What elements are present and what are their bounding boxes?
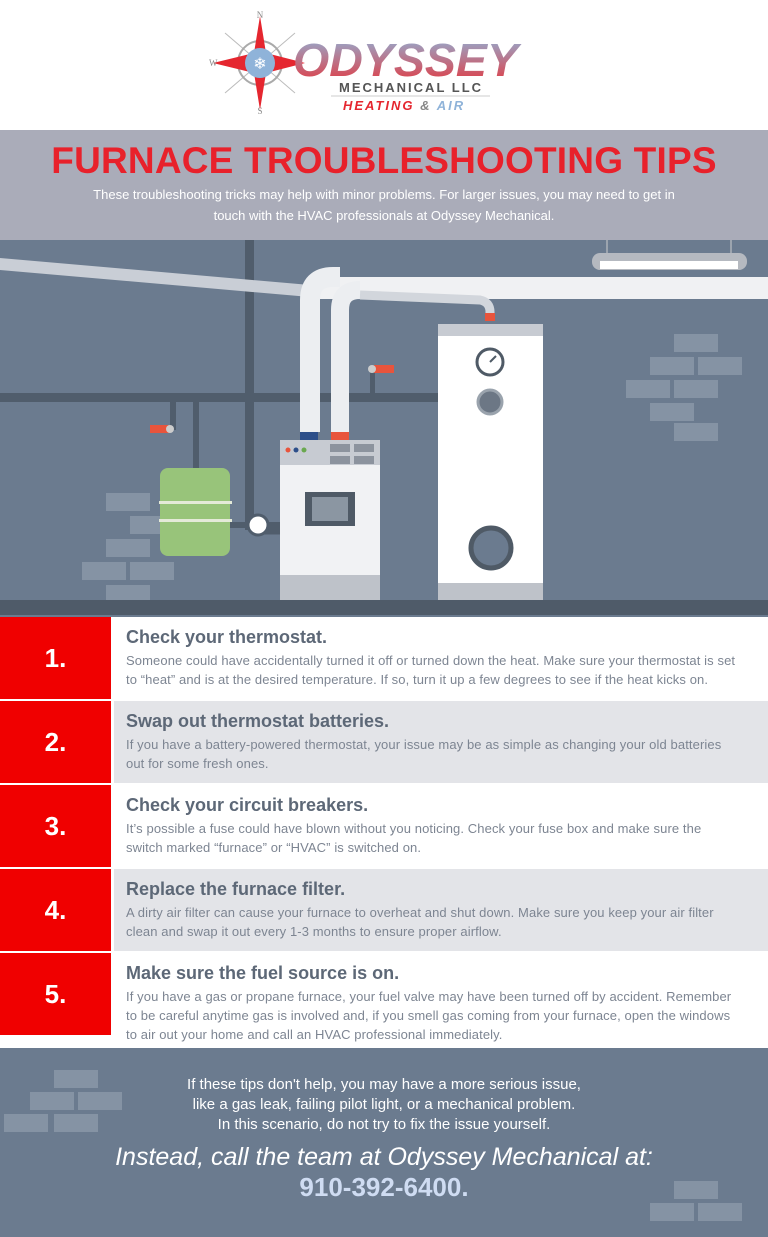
tip 4: 4. (45, 894, 66, 924)
footer note: If these tips don't help, you may have a more serious issue, (187, 1076, 581, 1093)
icon: compass: N (257, 10, 264, 20)
tip 5: If you have a gas or propane furnace, your fuel valve may have been turned off by accident. Remember to be careful anytime gas is involved and, if you smell gas coming from your furnace, open the windows to air out your home and call an HVAC professional immediately. (126, 989, 731, 1042)
footer note (187, 1076, 581, 1133)
logo text: HEATING & AIR (343, 98, 465, 113)
footer (0, 1048, 768, 1237)
furnace (280, 440, 380, 600)
icon: compass: ❄ (253, 56, 267, 73)
tip 4 (0, 869, 768, 951)
phone number: 910-392-6400. (299, 1172, 469, 1202)
tip 3: It’s possible a fuse could have blown without you noticing. Check your fuse box and make sure the switch marked “furnace” or “HVAC” is switched on. (126, 821, 701, 855)
icon: compass: S (257, 106, 263, 116)
icon: compass (209, 10, 305, 116)
icon: compass: W (209, 58, 218, 68)
illustration: basement furnace (0, 240, 768, 617)
tip 2 (0, 701, 768, 783)
footer note: In this scenario, do not try to fix the issue yourself. (218, 1116, 550, 1133)
tip 5: 5. (45, 978, 66, 1008)
tip 5: Make sure the fuel source is on. (126, 963, 399, 983)
logo (209, 10, 522, 116)
logo text (293, 34, 522, 113)
tip 3 (0, 785, 768, 867)
tip 4: A dirty air filter can cause your furnace to overheat and shut down. Make sure you keep your air filter clean and swap it out every 1-3 months to ensure proper airflow. (126, 905, 714, 939)
green tank (159, 468, 280, 556)
tip 2: Swap out thermostat batteries. (126, 711, 389, 731)
subtitle (93, 187, 675, 223)
tip 1: Check your thermostat. (126, 627, 327, 647)
tip 4: Replace the furnace filter. (126, 879, 345, 899)
pipes (0, 240, 768, 530)
tip 1 (0, 617, 768, 699)
water heater (438, 324, 543, 600)
tip 3: 3. (45, 810, 66, 840)
tip 2: 2. (45, 726, 66, 756)
tip 3: Check your circuit breakers. (126, 795, 368, 815)
title: FURNACE TROUBLESHOOTING TIPS (51, 140, 717, 181)
footer note: like a gas leak, failing pilot light, or a mechanical problem. (193, 1096, 575, 1113)
tip 1: 1. (45, 642, 66, 672)
title band (0, 130, 768, 240)
tip 1: Someone could have accidentally turned it off or turned down the heat. Make sure your thermostat is set to “heat” and is at the desired temperature. If so, turn it up a few degrees to see if the heat kicks on. (126, 653, 735, 687)
subtitle: These troubleshooting tricks may help with minor problems. For larger issues, you may need to get in (93, 187, 675, 202)
call to action: Instead, call the team at Odyssey Mechanical at: (115, 1143, 653, 1171)
tip 2: If you have a battery-powered thermostat, your issue may be as simple as changing your old batteries out for some fresh ones. (126, 737, 721, 771)
subtitle: touch with the HVAC professionals at Odyssey Mechanical. (214, 208, 554, 223)
tip 5 (0, 953, 768, 1047)
logo text: ODYSSEY (293, 34, 522, 86)
ceiling light (592, 240, 747, 270)
logo text: MECHANICAL LLC (339, 80, 483, 95)
